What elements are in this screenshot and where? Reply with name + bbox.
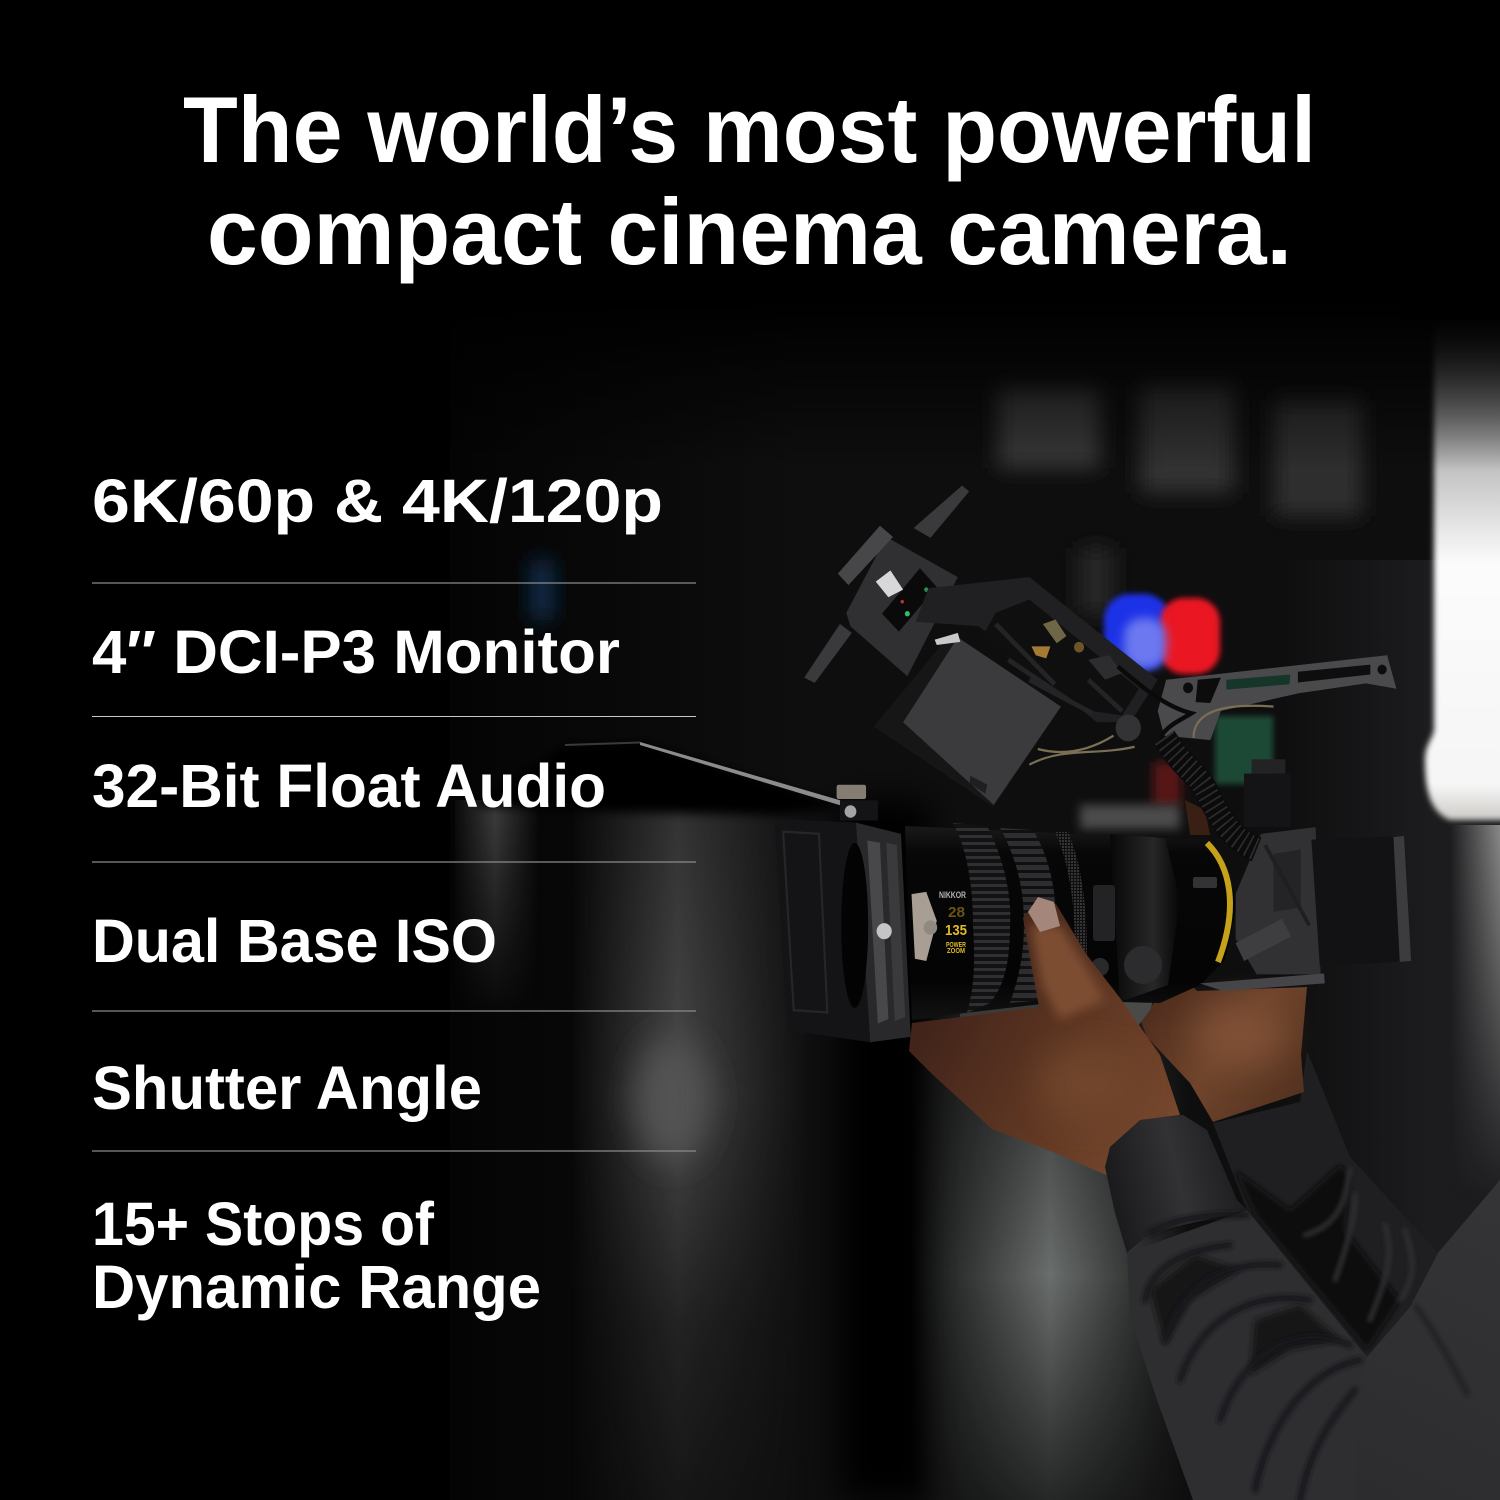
lens label: NIKKOR: NIKKOR	[939, 890, 966, 900]
feature: dynamic range: 15+ Stops of	[92, 1190, 435, 1258]
torso	[1350, 1180, 1500, 1500]
feature list	[92, 467, 696, 1321]
flip screen	[1311, 836, 1411, 966]
camera body	[1200, 759, 1325, 991]
yellow ring	[1207, 843, 1230, 962]
lens label: power zoom: ZOOM	[947, 948, 965, 955]
front sleeve	[1105, 1115, 1500, 1500]
lens label: 135: 135	[945, 922, 967, 939]
folds	[1145, 1215, 1360, 1500]
lower rig: matte box, body, screen, cable	[775, 666, 1411, 1042]
lens label: power zoom	[946, 942, 966, 955]
function button	[1091, 958, 1109, 976]
torso crease	[1415, 1305, 1468, 1395]
matte box	[775, 785, 937, 1042]
matte box flag	[470, 742, 846, 815]
lens	[905, 823, 1238, 1020]
top handle	[1158, 655, 1396, 740]
cable strands	[1029, 706, 1273, 765]
battery	[874, 633, 1061, 807]
mount buttons	[1193, 877, 1217, 888]
wireless receiver	[838, 526, 958, 676]
fold shadows	[1150, 1255, 1340, 1375]
forearm	[1127, 1210, 1367, 1500]
back arm sleeve	[1213, 1051, 1438, 1357]
title: compact cinema camera.	[207, 179, 1292, 284]
camera rig	[775, 486, 1411, 1042]
thumb highlight	[1030, 925, 1105, 1020]
blurred window shapes	[998, 385, 1362, 516]
monitor transmitter	[916, 577, 1158, 741]
title	[183, 77, 1316, 284]
rear hand	[1140, 800, 1307, 1122]
lens label: 28: 28	[948, 904, 965, 921]
tripod foot	[1112, 995, 1155, 1030]
zoom switch	[1093, 885, 1115, 941]
feature: ISO: Dual Base ISO	[92, 907, 497, 975]
thumbnail	[1028, 897, 1060, 932]
top rig: receiver, monitor, battery	[804, 486, 1396, 807]
focus ring	[953, 823, 1010, 1013]
antennas	[804, 486, 969, 683]
lens barrel highlight	[1110, 834, 1180, 1002]
feature: dynamic range	[92, 1190, 541, 1321]
feature: audio: 32-Bit Float Audio	[92, 752, 606, 820]
feature: monitor: 4″ DCI-P3 Monitor	[92, 618, 620, 686]
cuff	[1105, 1115, 1247, 1253]
white light panel	[1425, 320, 1500, 820]
feature: dynamic range: Dynamic Range	[92, 1253, 541, 1321]
feature: shutter: Shutter Angle	[92, 1054, 482, 1122]
knob	[1124, 946, 1162, 984]
front hand	[909, 897, 1180, 1175]
lens label: power zoom: POWER	[946, 942, 966, 949]
feature: resolution: 6K/60p & 4K/120p	[92, 467, 663, 535]
zoom ring	[1000, 828, 1056, 1003]
title: The world’s most powerful	[183, 77, 1316, 182]
colored bokeh lights	[1104, 594, 1220, 674]
back arm folds	[1305, 1170, 1412, 1320]
coiled cable	[1118, 666, 1309, 925]
background photo: blurred studio	[450, 290, 1500, 1500]
control ring	[1055, 832, 1087, 955]
under-lens grey backdrop	[960, 995, 1050, 1030]
